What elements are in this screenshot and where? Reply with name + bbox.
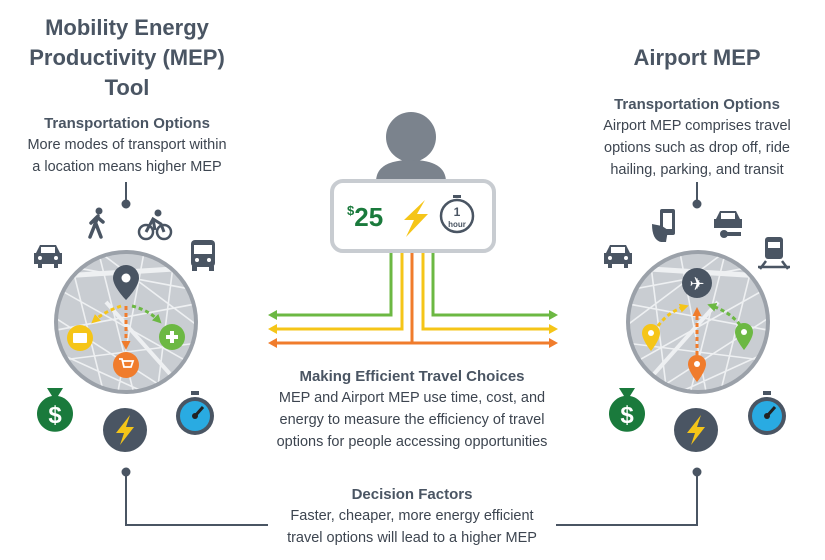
icon: money bag: $ xyxy=(48,402,62,429)
title: MEP tool: Tool xyxy=(105,75,149,100)
icon: money bag xyxy=(37,388,73,432)
text block: right transportation options: Transportation Options xyxy=(614,96,780,113)
text block: making efficient travel choices xyxy=(277,368,547,450)
title: MEP tool: Productivity (MEP) xyxy=(29,45,225,70)
text block: left transportation options: a location means higher MEP xyxy=(32,159,222,175)
icon: phone ride hailing xyxy=(652,209,675,242)
icon: energy bolt xyxy=(674,408,718,452)
card: cost, energy, time: $ xyxy=(347,203,355,218)
text block: right transportation options: Airport MEP comprises travel xyxy=(603,118,791,134)
icon: stopwatch xyxy=(176,391,214,435)
icon: money bag xyxy=(609,388,645,432)
icon: bus xyxy=(191,240,215,271)
text block: decision factors: Faster, cheaper, more energy efficient xyxy=(290,508,534,524)
icons: left transport xyxy=(34,208,215,271)
text block: decision factors xyxy=(287,486,537,546)
text block: left transportation options: Transportation Options xyxy=(44,115,210,132)
icons: decision factors right xyxy=(609,388,786,452)
icons: right transport xyxy=(604,209,790,269)
text block: making efficient travel choices: Making Efficient Travel Choices xyxy=(299,368,525,385)
icons: decision factors left xyxy=(37,388,214,452)
icon: stopwatch xyxy=(748,391,786,435)
icon: person xyxy=(376,112,446,182)
icon: walker xyxy=(90,208,103,237)
text block: making efficient travel choices: options for people accessing opportunities xyxy=(277,434,547,450)
text block: left transportation options: More modes of transport within xyxy=(27,137,227,153)
icon: car xyxy=(34,245,62,268)
map: right: ✈ xyxy=(689,274,705,294)
text block: left transportation options xyxy=(27,115,227,175)
arrows: travel options xyxy=(268,250,558,348)
text block: right transportation options: hailing, parking, and transit xyxy=(610,162,784,178)
text block: decision factors: travel options will lead to a higher MEP xyxy=(287,530,537,546)
card: cost, energy, time xyxy=(332,181,494,251)
title: MEP tool xyxy=(29,15,225,100)
text block: right transportation options xyxy=(603,96,791,178)
icon: bike xyxy=(139,210,171,239)
map: right xyxy=(626,250,770,394)
title: MEP tool: Mobility Energy xyxy=(45,15,210,40)
connectors xyxy=(122,182,700,525)
text block: right transportation options: options such as drop off, ride xyxy=(604,140,790,156)
icon: car with key xyxy=(714,211,742,238)
text block: making efficient travel choices: energy to measure the efficiency of travel xyxy=(280,412,544,428)
icon: energy bolt xyxy=(103,408,147,452)
icon: train xyxy=(758,237,790,269)
text block: making efficient travel choices: MEP and Airport MEP use time, cost, and xyxy=(279,390,545,406)
icon: money bag: $ xyxy=(620,402,634,429)
icon: car xyxy=(604,245,632,268)
card: cost, energy, time: 1 xyxy=(454,205,461,219)
card: cost, energy, time: 25 xyxy=(354,202,383,232)
title: Airport MEP: Airport MEP xyxy=(633,45,761,70)
card: cost, energy, time: hour xyxy=(448,220,466,229)
map: left xyxy=(54,250,198,394)
text block: decision factors: Decision Factors xyxy=(352,486,472,503)
